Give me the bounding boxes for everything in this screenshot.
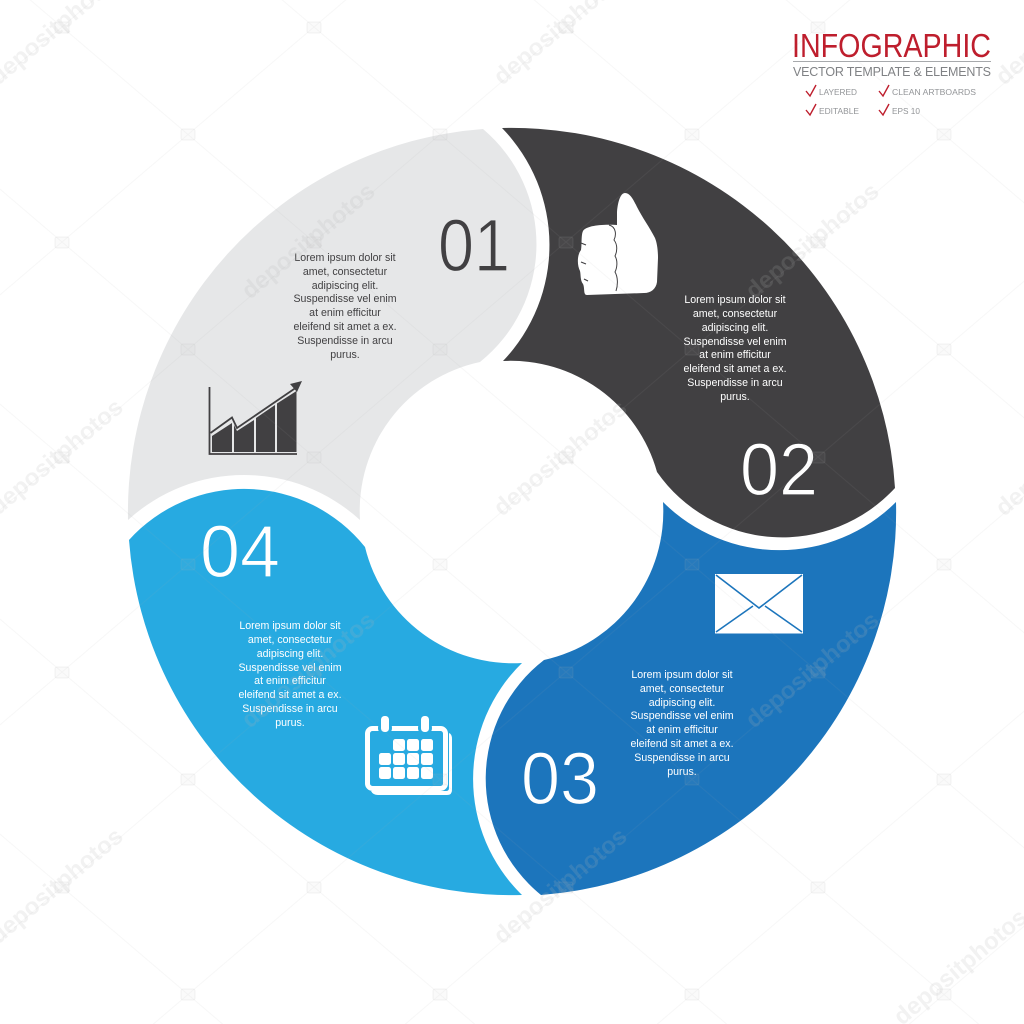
panel: segment 03 — [486, 502, 896, 895]
header: infographic title block — [792, 27, 991, 116]
segment 03 shape — [486, 502, 896, 895]
subtitle: VECTOR TEMPLATE & ELEMENTS — [793, 65, 991, 79]
watermarks: depositphotos — [489, 823, 633, 950]
text block 02: adipiscing elit. — [702, 322, 768, 334]
text block 04: eleifend sit amet a ex. — [238, 689, 342, 701]
text block 03: Suspendisse vel enim — [630, 710, 734, 722]
text block 01: purus. — [330, 349, 360, 361]
text block 02: Suspendisse in arcu — [687, 377, 783, 389]
checklist: EDITABLE — [819, 106, 859, 116]
segment 04 shape — [129, 489, 522, 895]
text block 01: at enim efficitur — [309, 307, 381, 319]
checklist: CLEAN ARTBOARDS — [892, 87, 976, 97]
panel: segment 02 — [502, 128, 895, 537]
text block 01: eleifend sit amet a ex. — [293, 321, 397, 333]
text block 01: Lorem ipsum dolor sit — [294, 252, 396, 264]
text block 02: at enim efficitur — [699, 349, 771, 361]
text block 03: eleifend sit amet a ex. — [630, 738, 734, 750]
segment 02 shape — [502, 128, 895, 537]
text block 03: amet, consectetur — [640, 683, 725, 695]
text block 04: Suspendisse vel enim — [238, 662, 342, 674]
text block 03: at enim efficitur — [646, 724, 718, 736]
number 01: 01 — [438, 204, 510, 287]
text block 02: Suspendisse vel enim — [683, 336, 787, 348]
text block 04: Suspendisse in arcu — [242, 703, 338, 715]
text block 03: Suspendisse in arcu — [634, 752, 730, 764]
text block 02: amet, consectetur — [693, 308, 778, 320]
text block 04: adipiscing elit. — [257, 648, 323, 660]
text block 01: Suspendisse in arcu — [297, 335, 393, 347]
text block 02: Lorem ipsum dolor sit — [684, 294, 786, 306]
number 03: 03 — [521, 737, 599, 820]
icon: thumbs up — [578, 193, 658, 295]
watermarks: depositphotos — [741, 178, 885, 305]
icon: calendar — [368, 716, 452, 795]
text block 01: Suspendisse vel enim — [293, 293, 397, 305]
segment 01 shape — [128, 129, 536, 520]
checklist: LAYERED — [819, 87, 857, 97]
text block 01: adipiscing elit. — [312, 280, 378, 292]
number 04: 04 — [200, 510, 280, 593]
text block 04: Lorem ipsum dolor sit — [239, 620, 341, 632]
checklist — [806, 85, 976, 116]
watermarks: depositphotos — [741, 607, 885, 734]
text block 04: purus. — [275, 717, 305, 729]
number 02: 02 — [740, 428, 818, 511]
watermarks: depositphotos — [237, 607, 381, 734]
panel: segment 04 — [129, 489, 522, 895]
text block 03: purus. — [667, 766, 697, 778]
text block 04: at enim efficitur — [254, 675, 326, 687]
watermarks: depositphotos — [237, 178, 381, 305]
text block 01: amet, consectetur — [303, 266, 388, 278]
watermarks: depositphotos — [489, 395, 633, 522]
text block 04: amet, consectetur — [248, 634, 333, 646]
text block 03: adipiscing elit. — [649, 697, 715, 709]
icon: growth chart — [210, 381, 302, 454]
text block 03: Lorem ipsum dolor sit — [631, 669, 733, 681]
panel: segment 01 — [128, 129, 536, 520]
title: INFOGRAPHIC — [792, 27, 991, 64]
checklist: EPS 10 — [892, 106, 920, 116]
text block 02: purus. — [720, 391, 750, 403]
icon: envelope — [715, 574, 803, 634]
text block 02: eleifend sit amet a ex. — [683, 363, 787, 375]
